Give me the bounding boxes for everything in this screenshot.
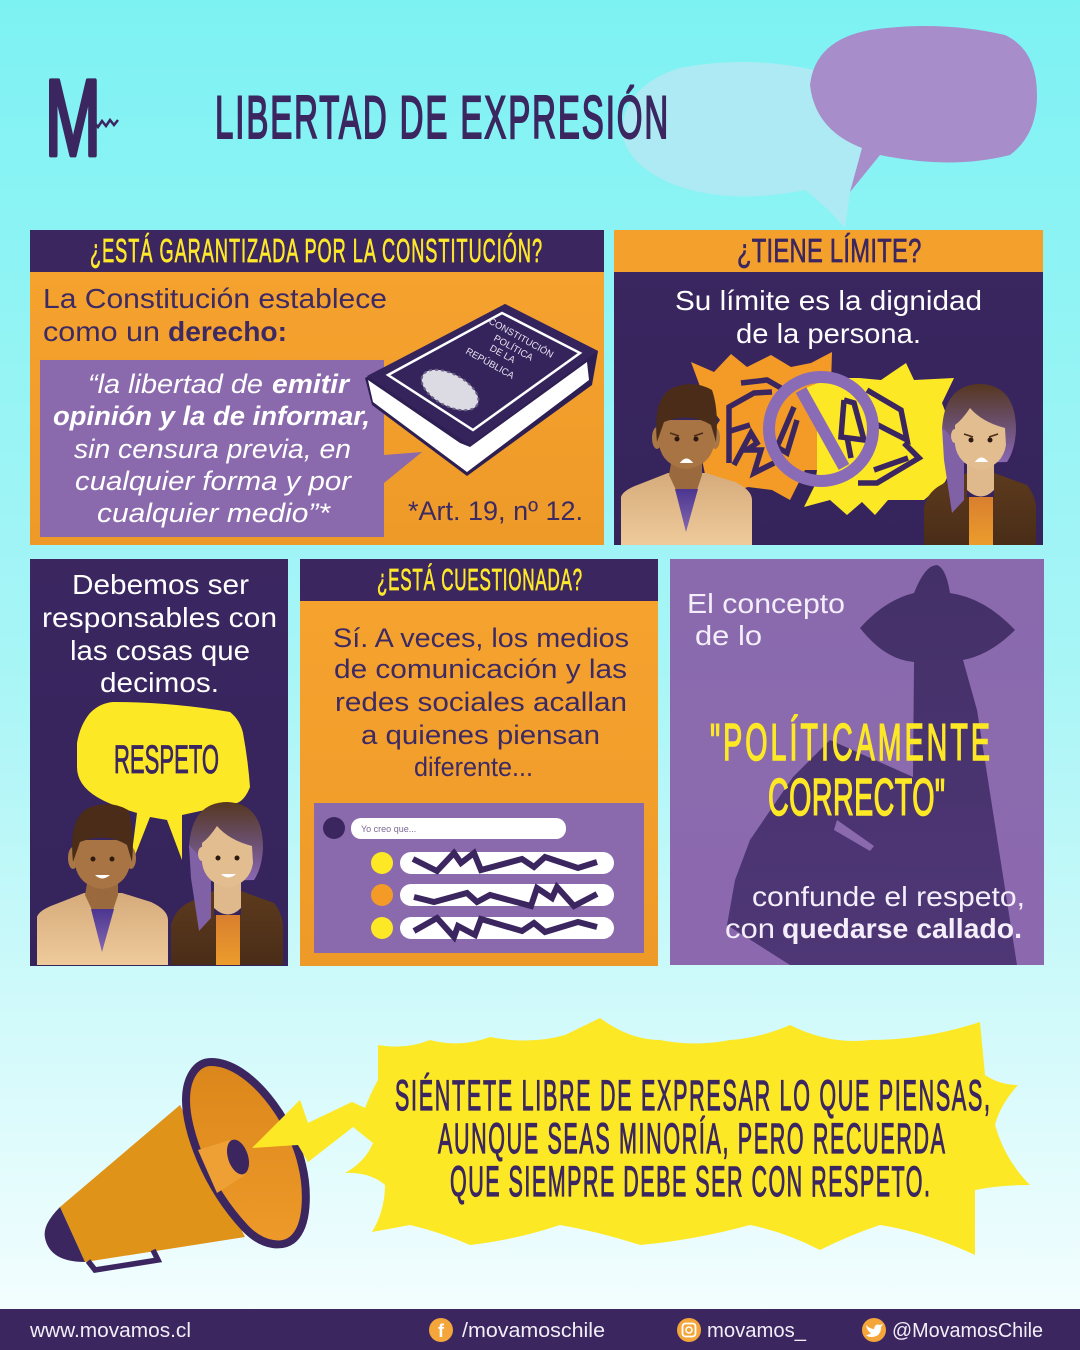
quote text: emitir bbox=[272, 369, 351, 399]
icon: twitter bbox=[862, 1318, 886, 1342]
facebook handle: /movamoschile bbox=[462, 1320, 605, 1342]
panel: politically correct bbox=[670, 559, 1044, 965]
text: confuses respect: confunde el respeto, bbox=[752, 881, 1025, 912]
word: respeto: RESPETO bbox=[114, 737, 219, 782]
quote text: cualquier forma y por bbox=[75, 466, 352, 496]
logo: Movamos M: M bbox=[45, 59, 101, 179]
message text bbox=[395, 1072, 990, 1206]
heading: politically correct: "POLÍTICAMENTE bbox=[710, 713, 990, 771]
panel: questioned bbox=[300, 559, 658, 966]
burst: orange bbox=[691, 352, 835, 500]
intro text: como un bbox=[43, 316, 160, 347]
questioned text: Sí. A veces, los medios bbox=[333, 623, 629, 653]
heading: constitution: ¿ESTÁ GARANTIZADA POR LA CONSTITUCIÓN? bbox=[90, 232, 542, 269]
questioned text: redes sociales acallan bbox=[335, 687, 627, 717]
panel header bbox=[300, 559, 658, 601]
article reference: *Art. 19, nº 12. bbox=[408, 496, 583, 526]
comment thread mockup bbox=[314, 803, 644, 953]
icon: constitution book: CONSTITUCIÓN bbox=[487, 316, 555, 361]
responsibility text: las cosas que bbox=[70, 635, 250, 666]
speech bubble: purple bbox=[810, 26, 1037, 192]
website: www.movamos.cl bbox=[29, 1320, 191, 1342]
limit text: de la persona. bbox=[736, 318, 921, 349]
questioned text: de comunicación y las bbox=[334, 654, 627, 684]
quote box bbox=[40, 360, 422, 537]
scribbled censored words bbox=[727, 380, 919, 483]
burst: yellow bbox=[801, 363, 960, 515]
icon: facebook bbox=[429, 1318, 453, 1342]
heading: questioned: ¿ESTÁ CUESTIONADA? bbox=[377, 561, 582, 597]
icon: shush finger silhouette bbox=[727, 565, 1017, 965]
questioned text: diferente... bbox=[414, 752, 533, 782]
panel: responsibility bbox=[30, 559, 288, 966]
panel header bbox=[614, 230, 1043, 272]
quote text: “la libertad de bbox=[88, 369, 263, 399]
comment thread mockup: Yo creo que... bbox=[361, 824, 416, 834]
heading: politically correct: CORRECTO" bbox=[768, 768, 945, 826]
icon: megaphone bbox=[45, 1062, 365, 1270]
icon: constitution book bbox=[365, 304, 598, 476]
responsibility text: decimos. bbox=[100, 667, 219, 698]
intro text: derecho: bbox=[168, 316, 287, 347]
person: angry man bbox=[621, 384, 752, 545]
responsibility text: responsables con bbox=[42, 602, 277, 633]
quote text: sin censura previa, en bbox=[74, 434, 351, 464]
text: confuses respect: con bbox=[725, 913, 775, 944]
panel: constitution bbox=[30, 230, 604, 545]
twitter handle: @MovamosChile bbox=[892, 1320, 1043, 1342]
questioned text: a quienes piensan bbox=[361, 720, 600, 750]
person: angry woman bbox=[924, 384, 1036, 545]
speech bubble: respeto bbox=[77, 702, 250, 868]
icon: constitution book: REPÚBLICA bbox=[464, 346, 517, 382]
person: smiling woman bbox=[171, 802, 283, 965]
instagram handle: movamos_ bbox=[707, 1320, 807, 1342]
icon: instagram bbox=[677, 1318, 701, 1342]
limit text: Su límite es la dignidad bbox=[675, 285, 982, 316]
message text: QUE SIEMPRE DEBE SER CON RESPETO. bbox=[450, 1158, 930, 1206]
text: concept: El concepto bbox=[687, 588, 845, 619]
panel: limit bbox=[614, 230, 1043, 545]
title: LIBERTAD DE EXPRESIÓN bbox=[215, 85, 668, 152]
icon: constitution book: DE LA bbox=[488, 343, 517, 366]
speech bubble: light blue bbox=[622, 62, 880, 228]
heading: limit: ¿TIENE LÍMITE? bbox=[737, 232, 921, 270]
callout: yellow burst with message bbox=[252, 1018, 1030, 1255]
text: concept: de lo bbox=[695, 620, 762, 651]
quote text: opinión y la de informar, bbox=[53, 401, 370, 431]
person: smiling man bbox=[37, 804, 168, 965]
quote text: cualquier medio”* bbox=[97, 498, 332, 528]
heading: politically correct bbox=[710, 713, 990, 826]
message text: AUNQUE SEAS MINORÍA, PERO RECUERDA bbox=[438, 1115, 945, 1163]
footer bar bbox=[0, 1309, 1080, 1350]
text: confuses respect: quedarse callado. bbox=[782, 913, 1022, 944]
icon: facebook: f bbox=[438, 1321, 445, 1341]
responsibility text: Debemos ser bbox=[72, 569, 249, 600]
icon: constitution book: POLÍTICA bbox=[492, 333, 535, 364]
intro text: La Constitución establece bbox=[43, 283, 387, 314]
icon: prohibition sign bbox=[769, 377, 873, 481]
message text: SIÉNTETE LIBRE DE EXPRESAR LO QUE PIENSAS, bbox=[395, 1072, 990, 1120]
panel header bbox=[30, 230, 604, 272]
